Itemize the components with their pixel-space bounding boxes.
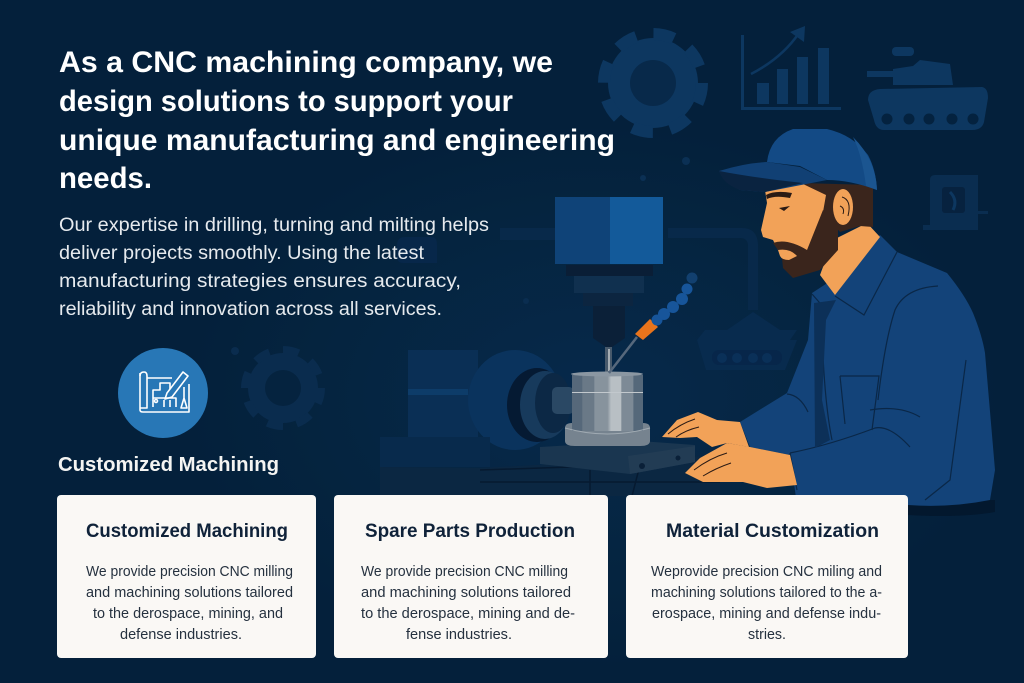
worker: beard (773, 210, 838, 278)
card body (361, 564, 575, 643)
card heading: Material Customization (666, 521, 879, 542)
worker: lower hand (685, 443, 797, 488)
card body: defense industries. (120, 627, 242, 643)
card body (86, 564, 293, 643)
card: customized machining (57, 495, 316, 658)
card heading: Customized Machining (86, 521, 288, 542)
icon: background bar chart (741, 26, 841, 110)
card body: and machining solutions tailored (86, 585, 293, 601)
worker: face (761, 184, 826, 252)
intro paragraph: reliability and innovation across all services. (59, 299, 442, 320)
card: material customization (626, 495, 908, 658)
card body: to the derospace, mining and de- (361, 606, 575, 622)
intro paragraph: Our expertise in drilling, turning and milting helps (59, 215, 489, 236)
headline: unique manufacturing and engineering (59, 124, 615, 157)
card body: fense industries. (406, 627, 512, 643)
worker: shirt details (787, 252, 966, 500)
card body: and machining solutions tailored (361, 585, 571, 601)
worker: ear (833, 189, 853, 225)
icon: background device (923, 175, 988, 230)
intro paragraph: deliver projects smoothly. Using the latest (59, 243, 425, 264)
headline: As a CNC machining company, we (59, 46, 553, 79)
worker: upper hand (662, 412, 749, 447)
card body: We provide precision CNC milling (86, 564, 293, 580)
headline: design solutions to support your (59, 85, 514, 118)
icon: background gear top (604, 34, 702, 181)
worker: hair (800, 183, 873, 232)
icon: blueprint badge (118, 348, 208, 438)
background pipes (397, 228, 758, 310)
icon: background gear lower (231, 347, 321, 426)
machine: spindle head (555, 197, 663, 373)
card heading: Spare Parts Production (365, 521, 575, 542)
card body: Weprovide precision CNC miling and (651, 564, 882, 580)
worker: shirt (740, 235, 995, 506)
machine: metal workpiece (565, 372, 650, 446)
machine: coolant nozzle (609, 272, 698, 373)
icon: background small tank (697, 312, 797, 370)
card body (651, 564, 882, 643)
intro paragraph (59, 215, 489, 320)
headline (59, 46, 615, 195)
card: spare parts production (334, 495, 608, 658)
headline: needs. (59, 162, 152, 195)
worker: cap (719, 129, 877, 192)
machine: rotary chuck (380, 350, 574, 467)
intro paragraph: manufacturing strategies ensures accuracy, (59, 271, 461, 292)
machine: work table (380, 441, 720, 496)
subheading: customized machining: Customized Machining (58, 453, 279, 476)
card body: stries. (748, 627, 786, 643)
card body: to the derospace, mining, and (93, 606, 283, 622)
worker: shadow under shirt (908, 500, 995, 516)
card body: We provide precision CNC milling (361, 564, 568, 580)
worker: neck (820, 223, 880, 295)
worker: eyebrow and eye (766, 192, 792, 211)
worker illustration (662, 129, 995, 516)
card body: erospace, mining and defense indu- (652, 606, 881, 622)
icon: background tank (867, 47, 988, 130)
card body: machining solutions tailored to the a- (651, 585, 882, 601)
